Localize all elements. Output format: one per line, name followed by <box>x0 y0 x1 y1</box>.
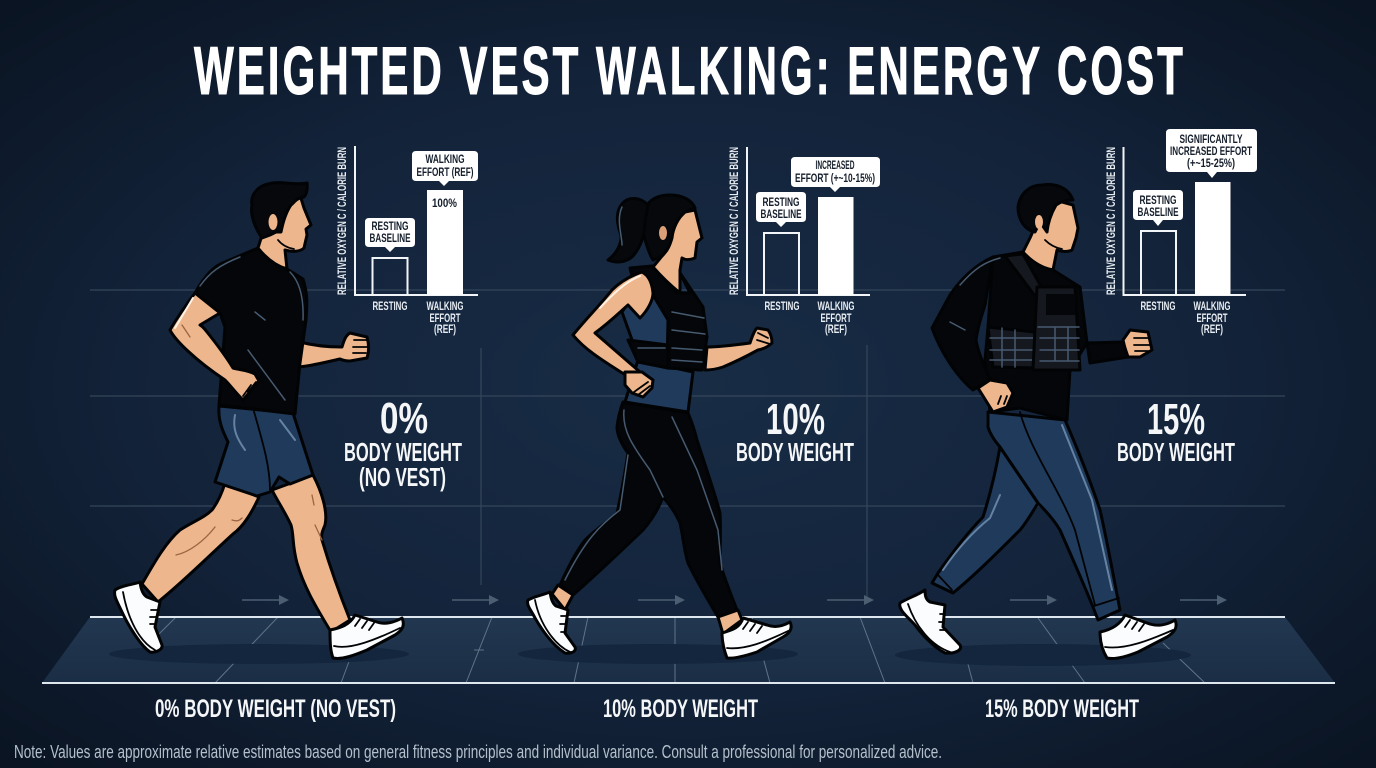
label: 15% body weight: 15% <box>1147 395 1205 444</box>
callout: increased effort <box>791 157 880 192</box>
callout: resting baseline <box>365 218 415 252</box>
callout: resting baseline <box>1133 190 1183 226</box>
label: 0% body weight (no vest): (NO VEST) <box>359 462 446 492</box>
y-axis label: RELATIVE OXYGEN C / CALORIE BURN <box>1106 147 1118 295</box>
resting bar <box>764 233 799 295</box>
figure: woman, 10% vest <box>528 195 791 658</box>
x-axis labels: RESTING <box>764 301 800 313</box>
callout: resting baseline: RESTING <box>762 195 800 209</box>
callout: walking effort <box>412 151 478 186</box>
chart: 15% body weight <box>1106 129 1257 336</box>
x-axis labels <box>1140 301 1231 336</box>
walking bar <box>818 197 854 295</box>
x-axis labels: EFFORT <box>1196 313 1228 325</box>
x-axis labels: RESTING <box>1140 301 1176 313</box>
label: 0% body weight (no vest): 0% <box>380 394 428 443</box>
walking bar <box>1195 182 1230 295</box>
callout: resting baseline: BASELINE <box>1138 205 1178 219</box>
x-axis labels: WALKING <box>426 301 464 313</box>
x-axis labels: (REF) <box>825 324 847 336</box>
x-axis labels: RESTING <box>372 301 408 313</box>
callout: resting baseline: BASELINE <box>760 207 802 221</box>
callout: significantly increased effort <box>1166 129 1257 178</box>
callout: walking effort: WALKING <box>426 152 464 166</box>
caption: 0%: 0% BODY WEIGHT (NO VEST) <box>155 695 396 723</box>
label: 0% body weight (no vest) <box>344 394 462 492</box>
x-axis labels: WALKING <box>818 301 855 313</box>
caption: 15%: 15% BODY WEIGHT <box>985 695 1139 723</box>
figure: man, no vest <box>115 183 403 658</box>
callout: increased effort: INCREASED <box>816 158 855 172</box>
resting bar <box>1141 231 1176 295</box>
callout: walking effort: EFFORT (REF) <box>416 165 474 179</box>
x-axis labels: EFFORT <box>820 313 852 325</box>
caption: 10%: 10% BODY WEIGHT <box>603 695 758 723</box>
title: WEIGHTED VEST WALKING: ENERGY COST <box>194 33 1183 108</box>
callout: resting baseline: RESTING <box>372 219 408 233</box>
direction arrows <box>242 595 1227 605</box>
callout: significantly increased effort: SIGNIFICANTLY <box>1180 132 1242 146</box>
y-axis label: RELATIVE OXYGEN C / CALORIE BURN <box>729 147 741 295</box>
x-axis labels: (REF) <box>1201 324 1223 336</box>
x-axis labels <box>372 301 464 336</box>
floor <box>42 617 1335 683</box>
resting bar <box>372 258 408 295</box>
callout: increased effort: EFFORT (+~10-15%) <box>795 171 875 185</box>
figure: man, 15% vest <box>900 185 1176 659</box>
label: 10% body weight: BODY WEIGHT <box>736 437 854 467</box>
footnote: Note: Values are approximate relative estimates based on general fitness principles and individual variance. Consult a professional for personalized advice. <box>14 742 942 762</box>
x-axis labels: WALKING <box>1194 301 1231 313</box>
callout: significantly increased effort: INCREASED EFFORT <box>1170 144 1252 158</box>
label: 15% body weight <box>1117 395 1235 467</box>
callout: resting baseline: RESTING <box>1140 193 1176 207</box>
callout: resting baseline <box>756 192 806 227</box>
y-axis label: RELATIVE OXYGEN C / CALORIE BURN <box>337 147 349 295</box>
chart: 10% body weight <box>729 147 880 336</box>
value: 100%: 100% <box>432 196 457 210</box>
x-axis labels <box>764 301 855 336</box>
label: 10% body weight <box>736 395 854 467</box>
x-axis labels: (REF) <box>434 324 456 336</box>
walking bar <box>427 190 463 295</box>
callout: resting baseline: BASELINE <box>370 231 410 245</box>
callout: significantly increased effort: (+~15-25%) <box>1187 156 1235 170</box>
label: 0% body weight (no vest): BODY WEIGHT <box>344 437 462 467</box>
label: 10% body weight: 10% <box>766 395 825 444</box>
x-axis labels: EFFORT <box>430 313 460 325</box>
label: 15% body weight: BODY WEIGHT <box>1117 437 1235 467</box>
chart: 0% body weight <box>337 146 478 336</box>
